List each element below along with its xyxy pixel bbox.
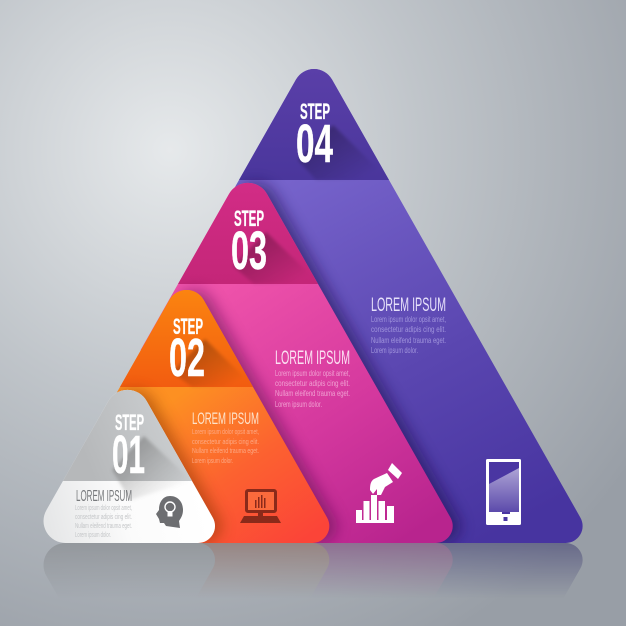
icon: hand placing bar chart xyxy=(356,463,402,523)
step 03 label: 03 xyxy=(231,221,267,281)
step 01 text: consectetur adipis cing elit. xyxy=(75,514,132,521)
icon: smartphone xyxy=(486,459,521,525)
step 01 text: Lorem ipsum dolor opsit amet, xyxy=(75,505,132,512)
step 01 text: LOREM IPSUM xyxy=(76,488,132,505)
step 03 text xyxy=(275,348,350,409)
step 02 text: consectetur adipis cing elit. xyxy=(192,437,259,446)
step 03 label: STEP xyxy=(234,206,264,231)
step 02 label: STEP xyxy=(173,314,203,339)
step 04 text xyxy=(371,295,446,355)
step 02 label xyxy=(169,314,205,388)
step 01 label: 01 xyxy=(112,425,145,485)
step 02 triangle xyxy=(116,290,330,543)
step 04 text: LOREM IPSUM xyxy=(371,295,446,316)
step 04 text: Nullam eleifend trauma eget. xyxy=(371,336,446,345)
step 04 text: Lorem ipsum dolor opsit amet, xyxy=(371,315,446,324)
step 02 label: 02 xyxy=(169,328,205,388)
step 02 text: Lorem ipsum dolor opsit amet, xyxy=(192,427,259,436)
step 03 text: Lorem ipsum dolor opsit amet, xyxy=(275,369,350,378)
icon: head with light bulb xyxy=(156,496,183,528)
step 04 text: consectetur adipis cing elit. xyxy=(371,325,446,334)
step 03 label xyxy=(231,206,267,281)
step 03 triangle xyxy=(140,182,453,543)
step 04 triangle xyxy=(234,69,583,543)
step 01 text: Lorem ipsum dolor. xyxy=(75,532,111,539)
step 04 label: 04 xyxy=(296,114,333,174)
step 03 text: Lorem ipsum dolor. xyxy=(275,400,322,409)
step 01 label: STEP xyxy=(115,410,144,435)
icon: computer monitor xyxy=(240,490,281,523)
step 02 text: Lorem ipsum dolor. xyxy=(192,456,233,465)
step 03 text: Nullam eleifend trauma eget. xyxy=(275,389,350,398)
step 01 text xyxy=(75,488,132,539)
step 02 text: LOREM IPSUM xyxy=(192,409,259,428)
step 03 text: LOREM IPSUM xyxy=(275,348,350,369)
step 01 label xyxy=(112,410,145,485)
step 04 label: STEP xyxy=(300,99,330,124)
step 02 text: Nullam eleifend trauma eget. xyxy=(192,446,259,455)
floor reflection xyxy=(44,543,583,590)
step 04 label xyxy=(296,99,333,174)
step 01 text: Nullam eleifend trauma eget. xyxy=(75,523,132,530)
step 01 triangle xyxy=(44,390,215,543)
step 03 text: consectetur adipis cing elit. xyxy=(275,379,350,388)
step 02 text xyxy=(192,409,259,465)
step 04 text: Lorem ipsum dolor. xyxy=(371,346,418,355)
